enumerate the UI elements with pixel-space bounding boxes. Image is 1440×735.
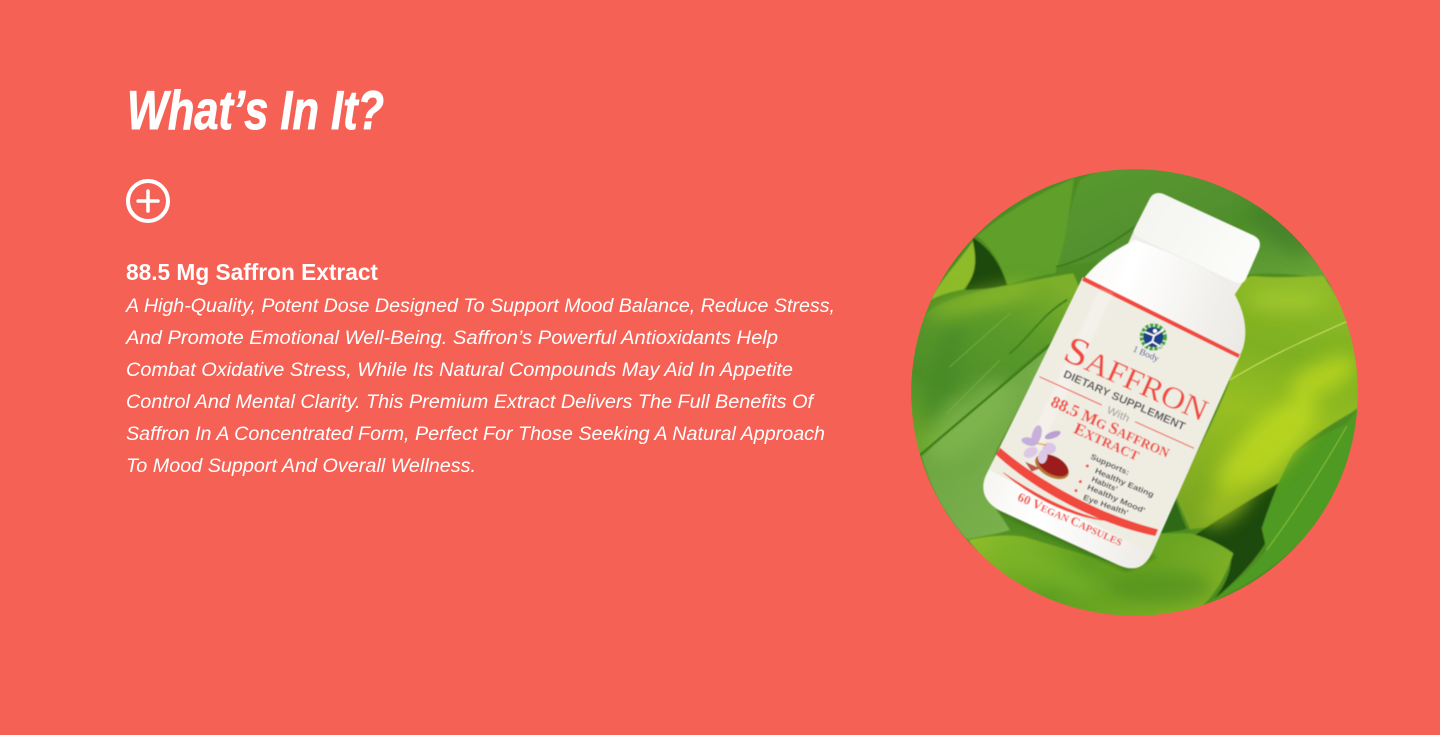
ingredient description: Combat Oxidative Stress, While Its Natural Compounds May Aid In Appetite — [126, 359, 793, 381]
capsule count: 60 VEGAN CAPSULES — [1015, 490, 1125, 549]
supports list: Eye Health' — [1082, 493, 1130, 517]
product name: SAFFRON — [1058, 327, 1216, 430]
bottle body — [983, 240, 1245, 568]
leaf veins — [920, 223, 1350, 550]
bottle cap — [1134, 193, 1260, 283]
bottle — [983, 193, 1260, 572]
ingredient description: To Mood Support And Overall Wellness. — [126, 455, 476, 477]
label — [989, 277, 1241, 553]
thin swoosh — [1003, 473, 1107, 521]
logo — [1142, 325, 1165, 349]
product photo: bottle on green leaves — [900, 160, 1370, 630]
extract: EXTRACT — [1071, 419, 1143, 465]
gloss — [1037, 288, 1114, 446]
supports list: Healthy Eating — [1094, 466, 1156, 499]
ingredient description: A High-Quality, Potent Dose Designed To Support Mood Balance, Reduce Stress, — [125, 295, 835, 317]
ingredient description — [125, 295, 835, 477]
dose: 88.5 MG SAFFRON — [1048, 392, 1173, 462]
leaf highlights — [915, 196, 1363, 603]
icon: plus in circle — [128, 181, 168, 221]
label lower band — [996, 448, 1158, 536]
bottle neck — [1127, 232, 1243, 297]
ingredient heading: 88.5 Mg Saffron Extract — [126, 259, 378, 285]
supports list: Supports: — [1089, 452, 1131, 477]
subtitle: DIETARY SUPPLEMENT — [1061, 368, 1187, 433]
supports list: Healthy Mood' — [1086, 483, 1147, 515]
divider lines — [1039, 377, 1194, 448]
supports list — [1074, 452, 1156, 517]
leaf background — [900, 160, 1370, 630]
flower and saffron bowl — [1021, 424, 1070, 480]
ingredient description: And Promote Emotional Well-Being. Saffron’s Powerful Antioxidants Help — [125, 327, 778, 349]
ingredient description: Control And Mental Clarity. This Premium Extract Delivers The Full Benefits Of — [126, 391, 816, 413]
bottle shadow — [998, 510, 1156, 572]
label top band — [1082, 277, 1240, 358]
ingredient description: Saffron In A Concentrated Form, Perfect For Those Seeking A Natural Approach — [126, 423, 825, 445]
supports list: Habits' — [1090, 475, 1119, 494]
title: What’s In It? — [127, 79, 384, 141]
logo name: 1 Body — [1132, 344, 1161, 364]
with: With — [1105, 405, 1131, 425]
